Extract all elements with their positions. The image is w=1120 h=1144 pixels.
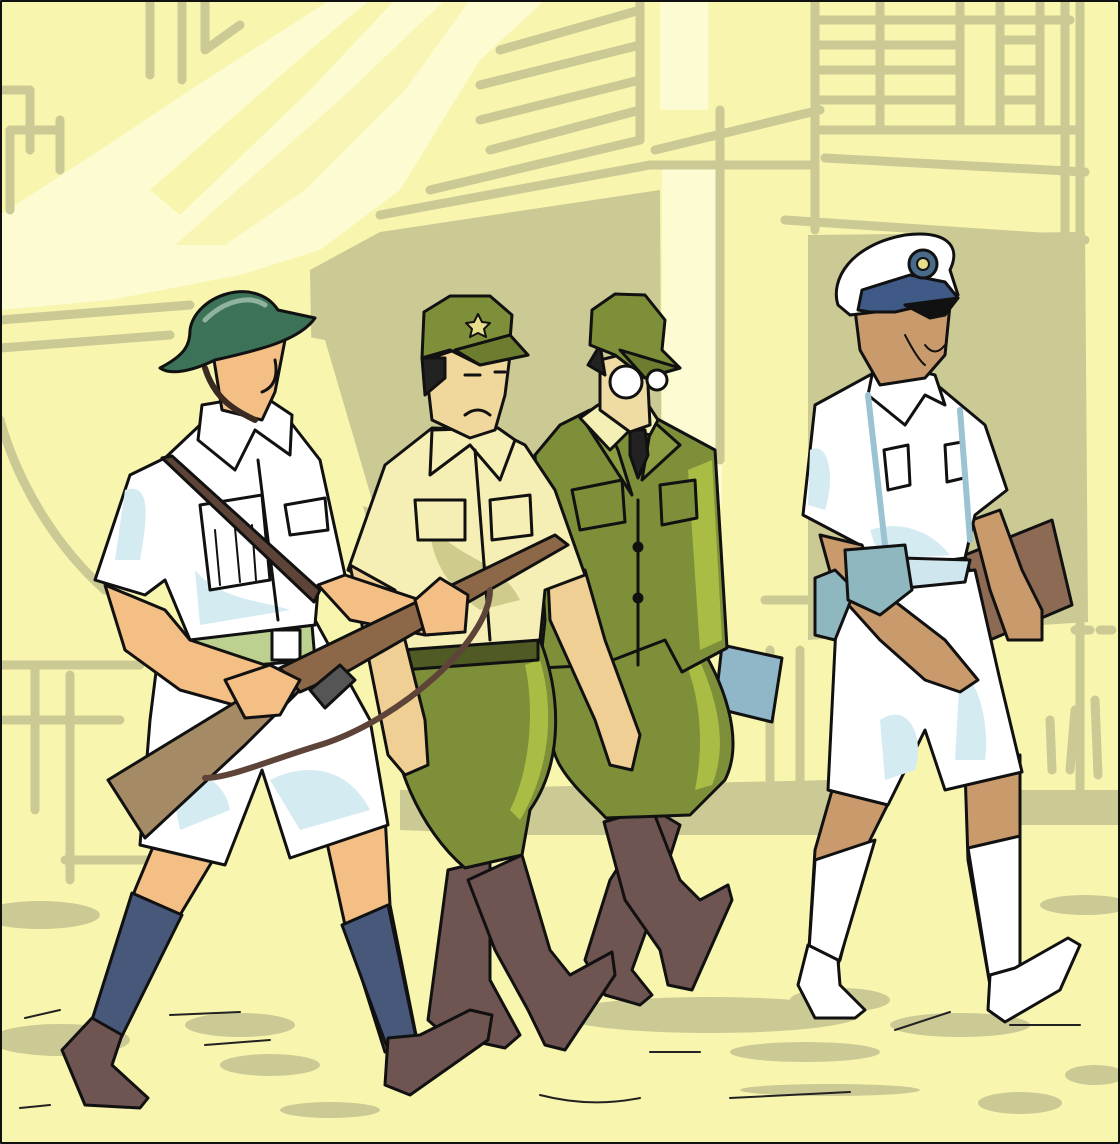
collar and tie [580,400,658,450]
building shadow [310,190,662,640]
left arm [350,565,428,775]
front boot [604,808,732,990]
building lines [0,0,1112,880]
shorts [828,570,1022,805]
breeches [548,630,733,818]
front leg [92,830,222,1025]
figure: officer in glasses, green uniform [535,294,782,1005]
head [855,305,950,385]
right arm [318,575,468,635]
bare arm left [105,585,280,715]
near arm [820,535,978,692]
rear leg [322,815,418,1052]
arm right [548,570,640,770]
front leg [808,780,895,965]
awning [0,0,545,310]
shirt [95,405,345,640]
curtain stripe [298,335,375,510]
cap [836,234,958,315]
column [660,0,708,110]
back boot [428,860,520,1048]
star badge [466,314,490,337]
helmet [160,292,315,372]
ground: shadows and dashes [0,895,1120,1118]
shirt [348,428,585,650]
head [425,345,510,438]
hands [415,578,468,635]
clipboard [965,520,1072,640]
jacket [535,410,727,672]
figure: soldier with rifle and helmet [62,292,568,1108]
head [600,350,668,432]
cap [590,294,680,378]
shirt [803,360,1007,570]
glasses [610,366,642,398]
blue folder [715,645,782,722]
front boot [468,855,615,1050]
back boot [585,810,680,1005]
figure: naval officer in white [798,234,1080,1022]
webbing belt and holster [900,558,970,588]
far arm [972,510,1042,640]
cap [422,296,528,365]
breeches [390,640,556,868]
shoes [798,945,865,1018]
rifle [108,535,568,838]
shorts [140,620,388,865]
neck and face [214,340,285,420]
shoulder strap [162,456,320,602]
front boot [62,1018,148,1108]
belt [185,625,315,670]
rear boot [385,1010,492,1095]
rear leg [965,755,1020,985]
figure: officer in khaki shirt [348,296,640,1050]
